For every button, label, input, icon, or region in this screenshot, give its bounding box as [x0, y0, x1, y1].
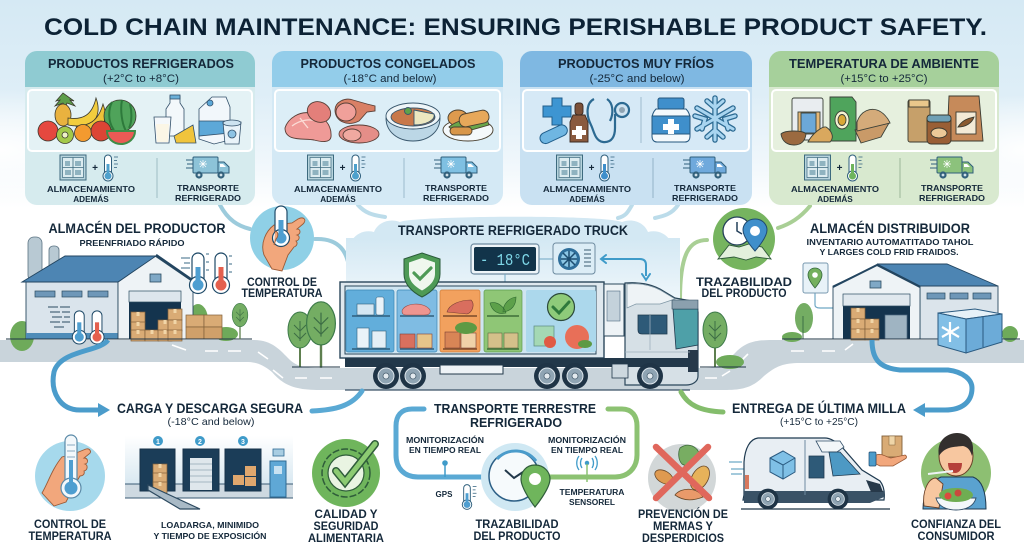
icon: storage: +	[837, 163, 843, 174]
panel: productos refrigerados: ADEMÁS	[73, 194, 109, 204]
temperature display: - 18°C	[480, 252, 530, 271]
temperature range: (+2°C to +8°C)	[103, 73, 179, 85]
icon: loading docks: 1	[156, 439, 160, 446]
label: quality: ALIMENTARIA	[308, 531, 384, 545]
icon: pill	[538, 123, 569, 145]
heading: carga y descarga: CARGA Y DESCARGA SEGURA	[117, 401, 303, 416]
sky and clouds behind truck	[346, 217, 680, 298]
arrow: loading to truck	[312, 391, 362, 411]
label: storage: ALMACENAMIENTO	[543, 185, 632, 194]
icon: producer warehouse	[6, 237, 252, 351]
icon: control de temperatura	[250, 206, 314, 271]
text: inventario: INVENTARIO AUTOMATITADO TAHOL	[806, 237, 974, 247]
icon: cold container	[938, 309, 1002, 353]
icon: delivery van	[729, 438, 890, 509]
panel: temperatura de ambiente	[769, 51, 999, 205]
arrow: truck to delivery	[681, 392, 723, 412]
panel: productos muy frios: REFRIGERADO	[672, 194, 739, 203]
icon: distributor warehouse	[782, 264, 1020, 342]
icon: consumer	[921, 433, 991, 510]
text: inventario	[806, 237, 974, 257]
temperature display	[471, 244, 553, 282]
label: sensor: SENSOREL	[569, 498, 615, 507]
label: consumer	[911, 517, 1001, 543]
icon: gps node	[442, 460, 448, 477]
icon: trees near truck	[288, 302, 340, 368]
loop: transporte terrestre	[396, 409, 637, 477]
icon: bowl	[386, 103, 440, 141]
icon: storage: +	[340, 163, 346, 174]
icon: dry food left	[781, 97, 890, 145]
truck	[340, 282, 698, 390]
icon: hand with parcel	[869, 436, 906, 466]
icon: control circle	[35, 435, 105, 511]
label: quality	[308, 507, 384, 545]
label: sensor	[560, 488, 625, 507]
icon: storage	[556, 155, 614, 181]
icon: tree and bush	[700, 312, 746, 369]
label: trazabilidad bottom: TRAZABILIDAD	[476, 517, 559, 531]
text: monitoring right: MONITORIZACIÓN	[548, 436, 626, 445]
heading: TEMPERATURA DE AMBIENTE	[789, 57, 979, 71]
compartment: dairy	[346, 290, 394, 352]
temperature range: (-18°C and below)	[344, 73, 436, 85]
icon: sandwich	[443, 109, 493, 141]
text: monitoring left	[406, 436, 484, 455]
text: monitoring left: MONITORIZACIÓN	[406, 436, 484, 445]
temperature range: (-25°C and below)	[590, 73, 684, 85]
panel connectors	[220, 205, 810, 300]
panel: productos congelados: REFRIGERADO	[423, 194, 490, 203]
cooling unit	[604, 284, 624, 336]
compartment: verified	[526, 290, 596, 352]
heading: transporte refrigerado truck: TRANSPORTE REFRIGERADO TRUCK	[398, 223, 628, 238]
label: transport: TRANSPORTE	[177, 184, 240, 193]
icon: storage	[804, 155, 862, 181]
label: quality: SEGURIDAD	[314, 519, 379, 533]
heading: PRODUCTOS CONGELADOS	[300, 57, 476, 71]
text: carga range: (-18°C and below)	[168, 416, 254, 428]
heading: transporte terrestre	[434, 401, 596, 430]
label: storage: ALMACENAMIENTO	[294, 185, 383, 194]
icon: transport	[683, 157, 726, 179]
label: waste prevention	[638, 506, 728, 545]
text: monitoring right: EN TIEMPO REAL	[551, 446, 623, 455]
icon: medicine jar	[652, 98, 690, 142]
text: TEMPERATURA	[242, 286, 323, 300]
heading: transporte terrestre: REFRIGERADO	[470, 415, 562, 430]
icon: storage	[60, 155, 118, 181]
text: entrega range: (+15°C to +25°C)	[780, 416, 858, 428]
icon: clock and pin	[481, 443, 550, 511]
icon: storage: +	[92, 163, 98, 174]
icon: location card	[803, 263, 833, 308]
panel: temperatura de ambiente: ADEMÁS	[817, 194, 853, 204]
arrow: distributor to delivery	[872, 340, 972, 410]
icon: trazabilidad top	[713, 208, 775, 270]
text: monitoring right	[548, 436, 626, 455]
compartment: produce	[484, 290, 522, 352]
icon: shield	[404, 253, 440, 297]
heading: almacen del productor: ALMACÉN DEL PRODUCTOR	[48, 221, 226, 236]
icon: loading docks: 3	[241, 439, 245, 446]
wheels	[373, 363, 663, 389]
label: trazabilidad bottom: DEL PRODUCTO	[474, 529, 560, 543]
heading: transporte terrestre: TRANSPORTE TERRESTRE	[434, 401, 596, 416]
panel: productos refrigerados	[25, 51, 255, 205]
label: waste prevention: PREVENCIÓN DE	[638, 506, 728, 521]
text: monitoring left: EN TIEMPO REAL	[409, 446, 481, 455]
icon: waste prevention	[648, 444, 716, 512]
label: gps: GPS	[436, 490, 453, 499]
trailer	[340, 282, 604, 358]
icon: transport	[930, 157, 973, 179]
cab	[625, 283, 698, 385]
arrow: airflow	[601, 255, 650, 280]
text: inventario: Y LARGES COLD FRID FRAIDOS.	[820, 247, 958, 257]
icon: loading docks: 2	[198, 439, 202, 446]
panel: productos muy frios	[520, 51, 752, 205]
label: trazabilidad: TRAZABILIDAD	[696, 275, 792, 289]
icon: warehouse thermometers	[72, 253, 232, 344]
icon: transport	[186, 157, 229, 179]
road	[0, 340, 1024, 390]
label: sensor: TEMPERATURA	[560, 488, 625, 497]
label: transport: TRANSPORTE	[674, 184, 737, 193]
text: DEL PRODUCTO	[702, 286, 786, 300]
panel: productos congelados	[272, 51, 503, 205]
text: TEMPERATURA	[28, 529, 112, 543]
icon: dry food right	[908, 96, 983, 144]
icon: sensor thermometer	[462, 485, 476, 509]
text: docks caption: Y TIEMPO DE EXPOSICIÓN	[154, 530, 266, 541]
compartment: meat	[397, 290, 437, 352]
panel: temperatura de ambiente: REFRIGERADO	[919, 194, 986, 203]
subheading: preenfriado: PREENFRIADO RÁPIDO	[80, 238, 185, 248]
title: COLD CHAIN MAINTENANCE: ENSURING PERISHABLE PRODUCT SAFETY.	[44, 14, 987, 41]
heading: entrega: ENTREGA DE ÚLTIMA MILLA	[732, 401, 906, 416]
label: quality: CALIDAD Y	[314, 507, 378, 521]
label: waste prevention: MERMAS Y	[653, 519, 713, 533]
label: transport: TRANSPORTE	[425, 184, 488, 193]
icon: cooling fan	[553, 243, 595, 274]
label: storage: ALMACENAMIENTO	[47, 185, 136, 194]
icon: dairy	[154, 95, 241, 144]
heading: almacen distribuidor: ALMACÉN DISTRIBUIDOR	[810, 221, 970, 236]
panel: productos refrigerados: REFRIGERADO	[175, 194, 242, 203]
text: docks caption: LOADARGA, MINIMIDO	[161, 520, 259, 530]
compartment: protein	[440, 290, 480, 352]
heading: PRODUCTOS MUY FRÍOS	[558, 56, 714, 71]
label: control de temperatura: CONTROL DE	[247, 275, 317, 289]
panel: productos congelados: ADEMÁS	[320, 194, 356, 204]
icon: transport	[434, 157, 477, 179]
label: trazabilidad bottom	[474, 517, 560, 543]
label: consumer: CONFIANZA DEL	[911, 517, 1001, 531]
icon: stethoscope	[588, 99, 629, 142]
icon: quality badge	[312, 439, 380, 507]
icon: snowflake	[695, 98, 735, 140]
label: control: CONTROL DE	[34, 517, 106, 531]
panel: productos muy frios: ADEMÁS	[569, 194, 605, 204]
icon: loading docks	[125, 436, 293, 509]
label: consumer: CONSUMIDOR	[918, 529, 995, 543]
temperature range: (+15°C to +25°C)	[840, 73, 928, 85]
label: waste prevention: DESPERDICIOS	[642, 531, 724, 545]
icon: tree	[232, 303, 248, 339]
icon: meat	[285, 98, 379, 143]
icon: medical cross	[543, 98, 571, 125]
label: storage: ALMACENAMIENTO	[791, 185, 880, 194]
heading: PRODUCTOS REFRIGERADOS	[48, 57, 234, 71]
icon: sensor signal	[577, 456, 597, 482]
label: transport: TRANSPORTE	[921, 184, 984, 193]
icon: dropper	[570, 103, 588, 142]
arrow: producer to loading	[53, 340, 108, 410]
icon: fruit	[38, 93, 136, 144]
icon: storage	[308, 155, 366, 181]
icon: storage: +	[589, 163, 595, 174]
chassis	[345, 358, 690, 367]
text: docks caption	[154, 520, 266, 541]
